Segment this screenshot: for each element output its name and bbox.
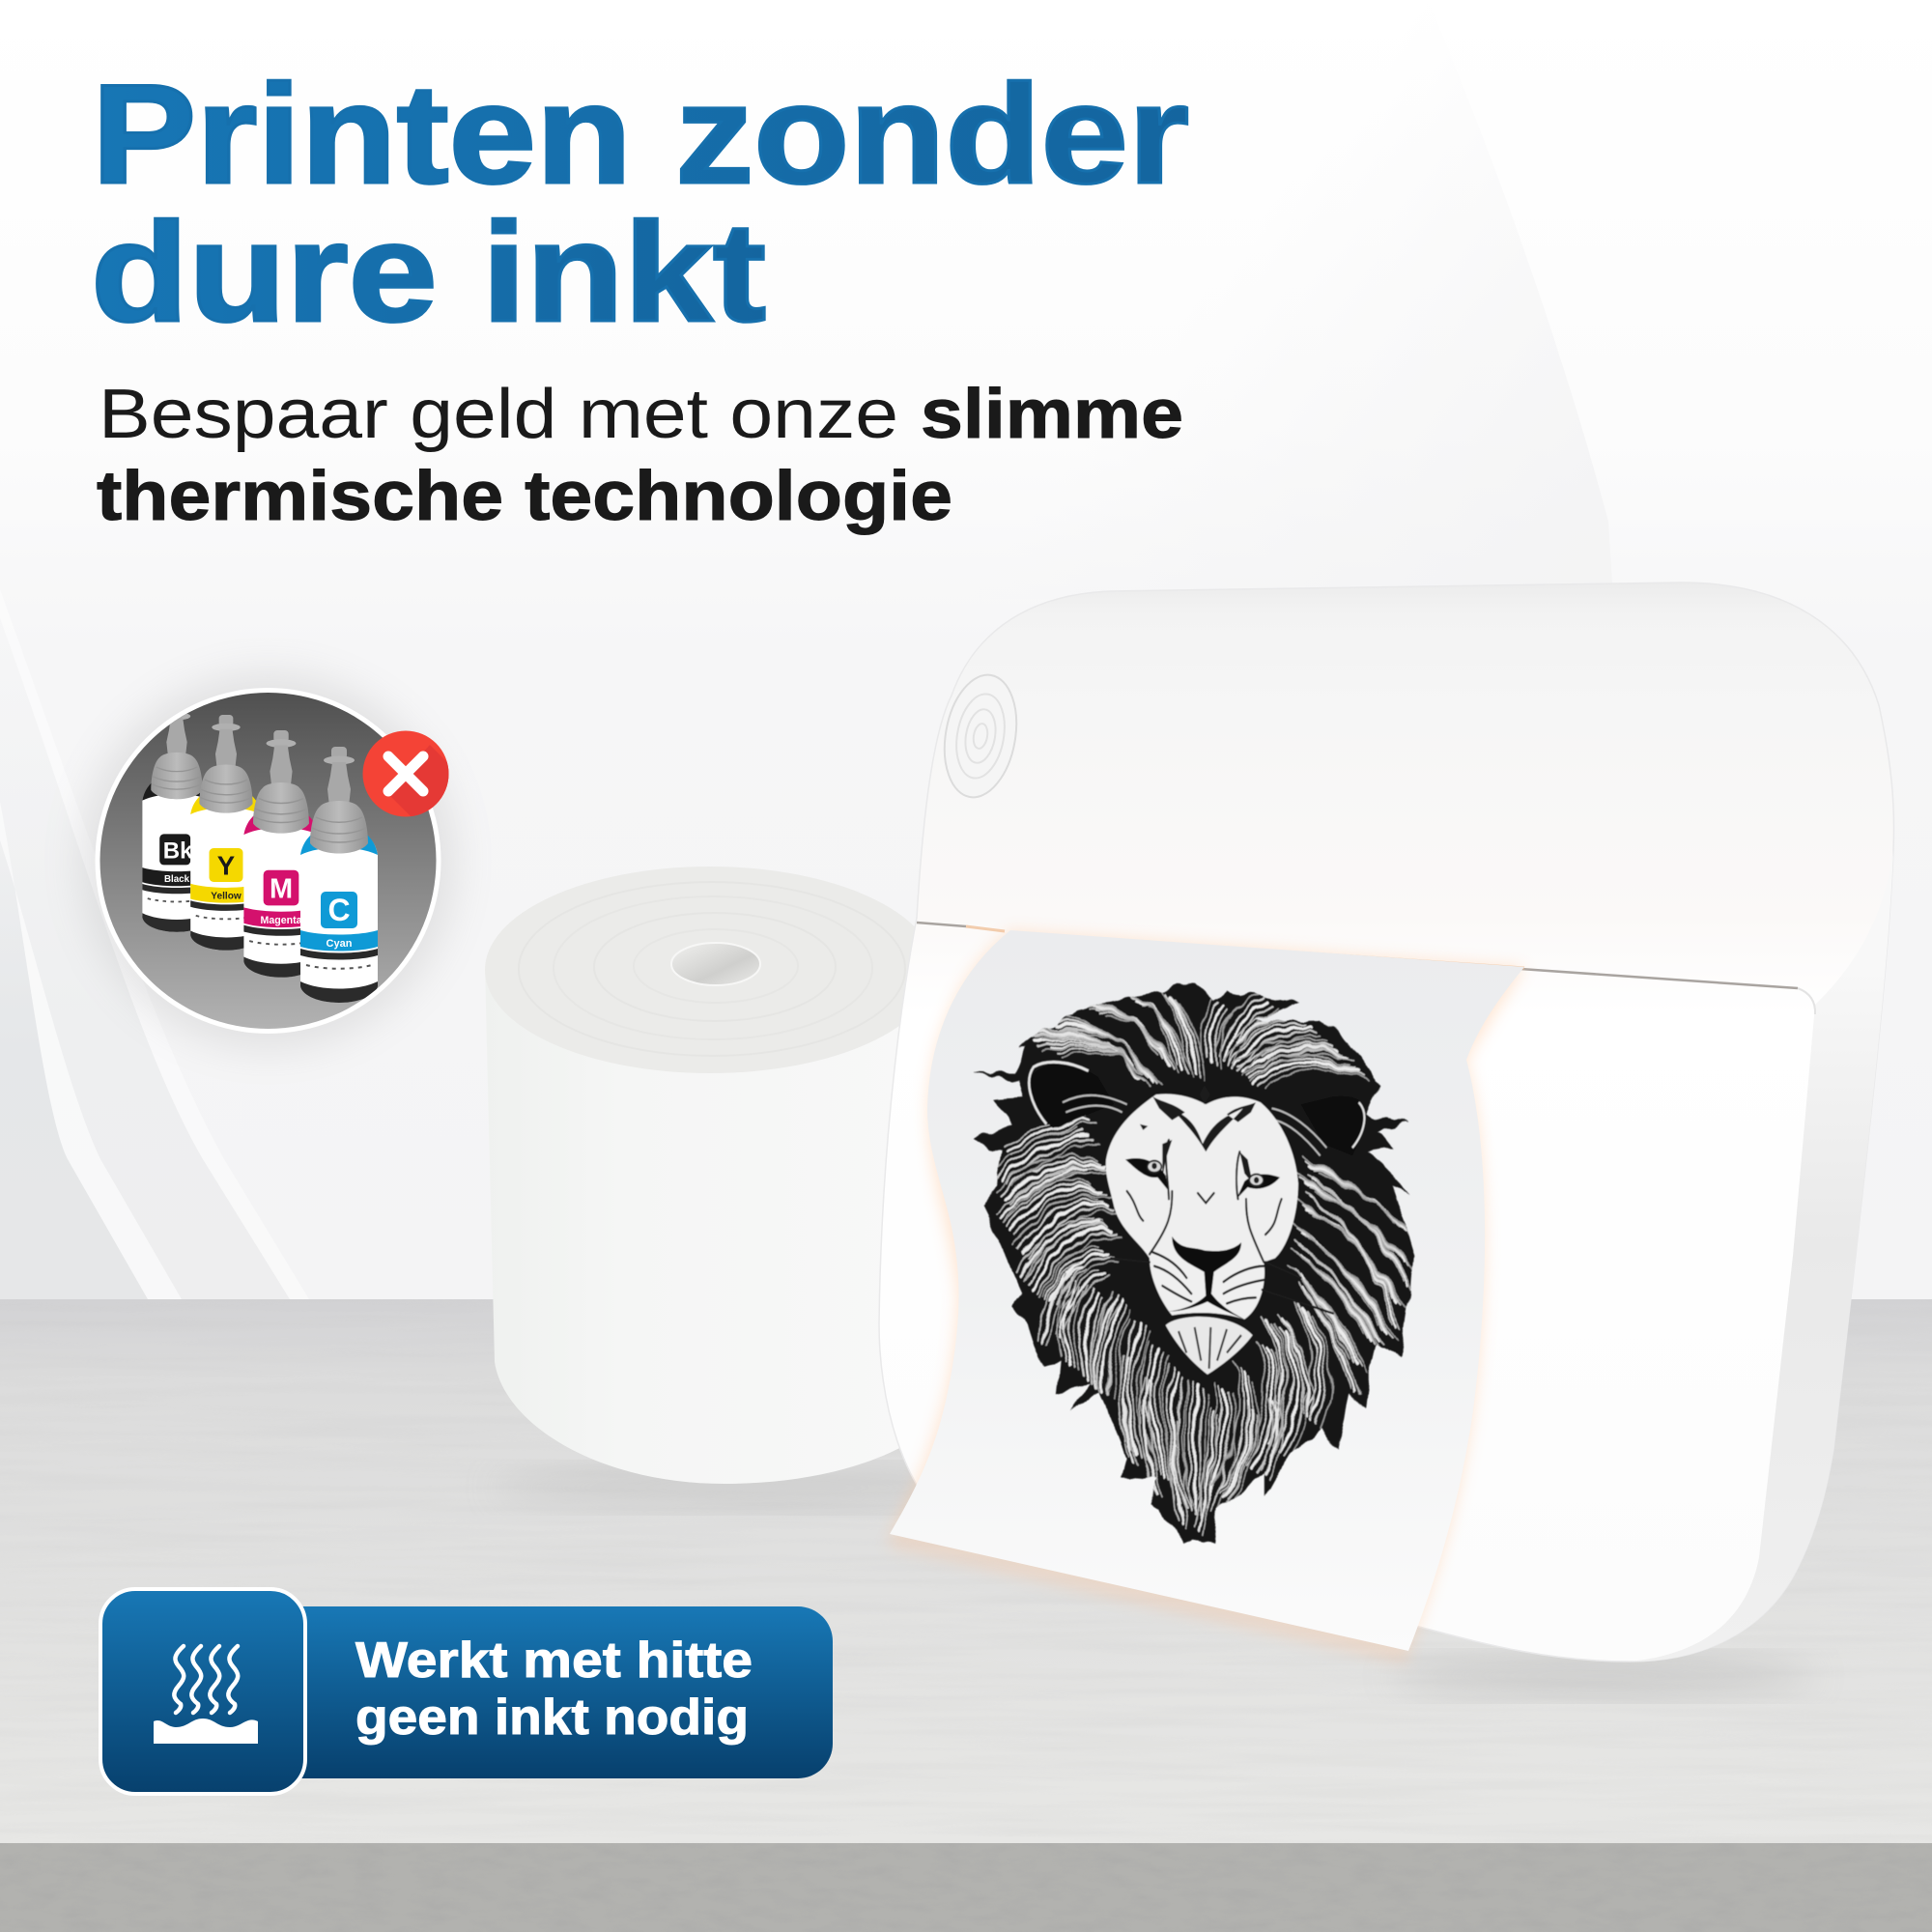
magenta ink bottle: Magenta bbox=[260, 915, 302, 926]
yellow ink bottle: Y bbox=[217, 851, 235, 881]
icon: heat waves bbox=[174, 1646, 238, 1713]
red cross badge bbox=[363, 730, 448, 817]
lion ears bbox=[1029, 1064, 1114, 1128]
subtitle: thermische technologie bbox=[97, 458, 952, 535]
magenta ink bottle bbox=[243, 730, 319, 978]
lion facial lines bbox=[1111, 1140, 1333, 1314]
lion nose and mouth bbox=[1169, 1236, 1244, 1320]
lion forehead markings bbox=[1140, 1085, 1256, 1183]
seam bbox=[917, 923, 1798, 988]
power button bbox=[935, 669, 1026, 803]
black ink bottle: Bk bbox=[163, 838, 193, 864]
badge text bbox=[355, 1633, 753, 1746]
icon tile bbox=[100, 1589, 305, 1794]
subtitle bbox=[97, 376, 1183, 535]
lion face bbox=[1106, 1094, 1298, 1320]
yellow ink bottle bbox=[190, 715, 262, 951]
title: Printen zonder bbox=[92, 55, 1189, 213]
cyan ink bottle: C bbox=[327, 893, 351, 927]
title: dure inkt bbox=[91, 193, 766, 351]
yellow ink bottle: Yellow bbox=[211, 891, 242, 901]
ink bottles callout bbox=[79, 672, 464, 1049]
subtitle: Bespaar geld met onze bbox=[99, 376, 898, 453]
title bbox=[91, 55, 1189, 351]
badge text: Werkt met hitte bbox=[355, 1633, 753, 1689]
thermal paper roll bbox=[485, 867, 942, 1484]
table front edge bbox=[0, 1843, 1932, 1932]
shadow under products bbox=[493, 1470, 1816, 1693]
roll core hole bbox=[671, 943, 760, 985]
lion chin bbox=[1166, 1317, 1253, 1375]
printed paper bbox=[890, 930, 1524, 1651]
subtitle: slimme bbox=[921, 376, 1183, 453]
cyan ink bottle bbox=[300, 747, 378, 1003]
printer bbox=[879, 582, 1893, 1662]
badge pill bbox=[232, 1606, 833, 1778]
lion illustration bbox=[973, 982, 1413, 1546]
printer side band bbox=[1630, 850, 1893, 1662]
black ink bottle bbox=[142, 713, 203, 932]
cyan ink bottle: Cyan bbox=[327, 938, 353, 950]
black ink bottle: Black bbox=[164, 874, 190, 885]
magenta ink bottle: M bbox=[270, 874, 293, 905]
badge text: geen inkt nodig bbox=[355, 1690, 749, 1746]
background wall bbox=[0, 0, 1932, 1304]
feature badge bbox=[100, 1589, 833, 1794]
paper glow bbox=[890, 930, 1524, 1659]
wooden table top bbox=[0, 1299, 1932, 1845]
lion eyes bbox=[1125, 1158, 1280, 1199]
icon: heated surface bbox=[154, 1719, 258, 1744]
